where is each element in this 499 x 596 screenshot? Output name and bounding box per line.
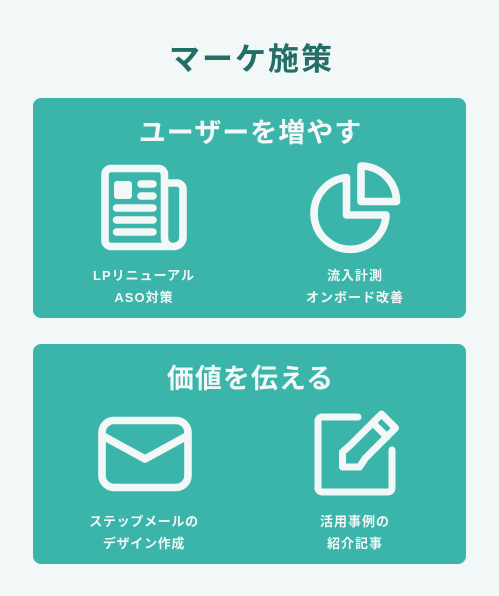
heading: convey value: 価値を伝える [167,364,334,394]
icon: envelope [98,416,192,492]
heading: increase users: ユーザーを増やす [139,118,362,148]
caption: LP renewal, ASO: LPリニューアル [93,268,195,283]
caption: case studies: 紹介記事 [327,536,383,551]
panel: convey value [33,344,466,564]
caption: inflow measurement, onboarding [306,268,404,305]
caption: step mail design: デザイン作成 [103,536,185,551]
caption: inflow measurement, onboarding: オンボード改善 [306,290,404,305]
caption: step mail design [89,514,199,551]
title: マーケ施策 [169,42,334,77]
panel: increase users [33,98,466,318]
caption: step mail design: ステップメールの [89,514,199,529]
icon: newspaper [101,164,187,250]
icon: pie chart [310,162,400,254]
caption: inflow measurement, onboarding: 流入計測 [327,268,383,283]
caption: case studies: 活用事例の [320,514,390,529]
icon: pencil and square [314,410,399,496]
caption: LP renewal, ASO: ASO対策 [114,290,174,305]
caption: case studies [320,514,390,551]
caption: LP renewal, ASO [93,268,195,305]
